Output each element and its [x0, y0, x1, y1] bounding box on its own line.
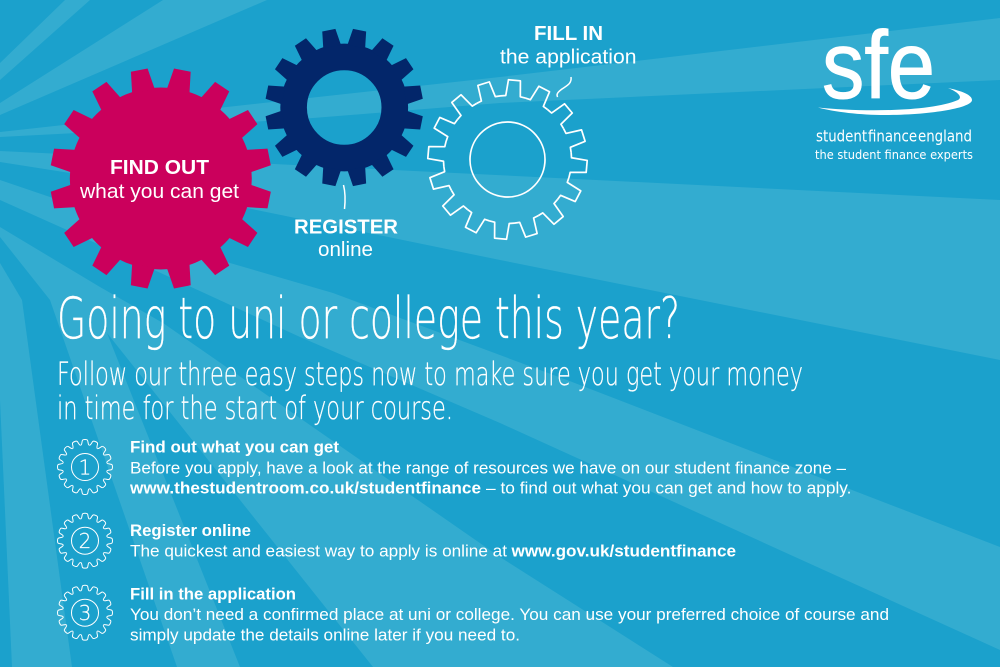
step 2 text: Register online [130, 522, 251, 540]
step 1 text [129, 439, 851, 497]
step 3 text: Fill in the application [130, 585, 296, 603]
icon: pink gear [50, 68, 271, 289]
subheading: in time for the start of your course. [57, 389, 453, 427]
icon: step 1 gear: 1 [79, 456, 91, 480]
label: register online: REGISTER [294, 216, 398, 238]
step 3 text: simply update the details online later if you need to. [130, 627, 520, 645]
step 3 text: You don’t need a confirmed place at uni or college. You can use your preferred choice of course and [130, 606, 889, 624]
icon: step 1 gear [58, 440, 112, 494]
step 1 text: Before you apply, have a look at the range of resources we have on our student finance zone – [130, 459, 846, 477]
icon: step 3 gear: 3 [79, 601, 91, 625]
icon: outline gear [421, 73, 594, 246]
subheading [57, 355, 803, 427]
step 3 text [130, 585, 889, 645]
logo: student finance england: the student finance experts [815, 147, 973, 162]
label: register online [294, 216, 398, 261]
icon: step 2 gear: 2 [79, 529, 91, 553]
callout line: register [344, 185, 345, 209]
logo: student finance england: student finance england [816, 127, 972, 146]
label: find out what you can get: FIND OUT [110, 157, 209, 179]
step 2 text [130, 522, 736, 561]
icon: step 3 gear [58, 585, 112, 640]
icon: navy gear [265, 28, 423, 187]
step 1 text: – to find out what you can get and how to apply. [486, 479, 852, 497]
icon: step 2 gear [58, 513, 112, 568]
label: fill in the application: the application [500, 45, 636, 68]
step 2 text: www.gov.uk/studentfinance [510, 543, 736, 561]
heading: Going to uni or college this year? [57, 286, 680, 352]
label: register online: online [318, 238, 373, 261]
logo: student finance england [815, 12, 973, 162]
label: find out what you can get: what you can get [79, 180, 239, 203]
step 1 text: www.thestudentroom.co.uk/studentfinance [129, 479, 481, 497]
logo: student finance england: sfe [822, 12, 935, 119]
label: find out what you can get [79, 157, 239, 203]
label: fill in the application [500, 23, 636, 68]
step 1 text: Find out what you can get [130, 439, 340, 457]
label: fill in the application: FILL IN [534, 23, 603, 45]
step 2 text: The quickest and easiest way to apply is online at [130, 543, 508, 561]
callout line: fill in [557, 77, 571, 97]
